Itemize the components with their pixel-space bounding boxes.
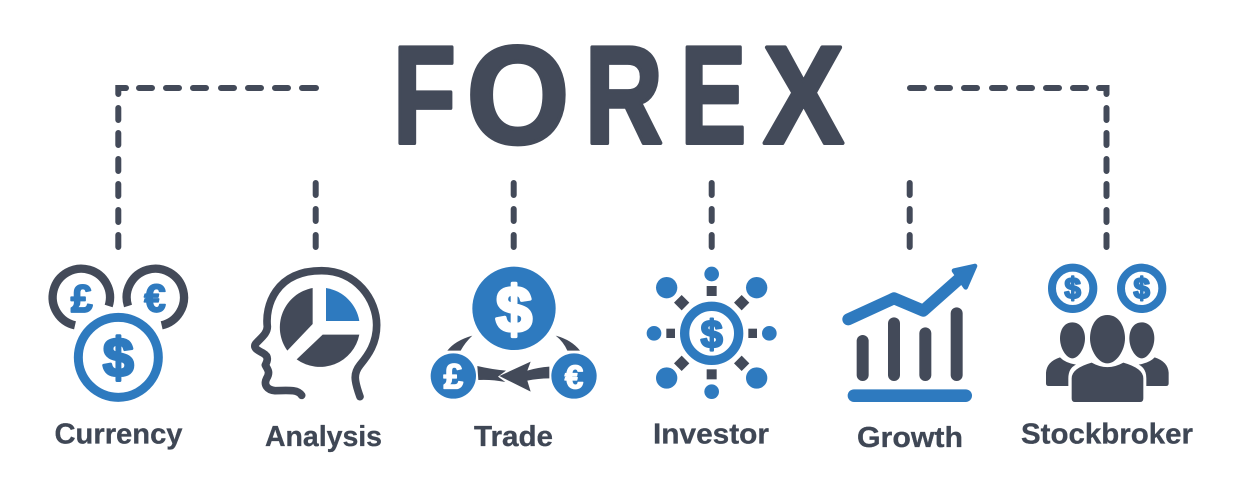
icon: head with pie chart bbox=[255, 271, 377, 397]
icon: currency trade exchange bbox=[431, 267, 597, 399]
label: Growth: Growth bbox=[857, 422, 963, 454]
label: Investor: Investor bbox=[653, 418, 769, 450]
icon: currency coins: € bbox=[144, 278, 166, 321]
icon: stockbroker group: $ bbox=[1134, 273, 1150, 306]
dashed connector: title to Stockbroker bbox=[910, 88, 1106, 247]
icon: currency trade exchange: $ bbox=[496, 272, 532, 345]
icon: currency trade exchange: £ bbox=[444, 358, 464, 397]
label: Trade: Trade bbox=[474, 421, 553, 453]
label: Analysis: Analysis bbox=[265, 421, 382, 453]
dashed connector: Trade bbox=[511, 183, 517, 247]
label: Stockbroker: Stockbroker bbox=[1021, 418, 1193, 450]
icon: currency coins: £ bbox=[71, 277, 93, 321]
icon: growth bar chart bbox=[848, 266, 975, 402]
title: FOREX: X bbox=[763, 17, 844, 173]
title: FOREX: R bbox=[585, 18, 663, 173]
icon: stockbroker group: $ bbox=[1065, 273, 1081, 306]
icon: currency coins bbox=[53, 269, 184, 397]
dashed connector: Analysis bbox=[313, 183, 319, 247]
title: FOREX: E bbox=[680, 17, 746, 173]
dashed connector: Growth bbox=[907, 183, 913, 247]
icon: investor network bbox=[647, 267, 777, 399]
label: Currency: Currency bbox=[54, 418, 182, 450]
icon: stockbroker group bbox=[1046, 268, 1169, 402]
dashed connector: Investor bbox=[709, 183, 715, 247]
title: FOREX: O bbox=[467, 17, 569, 173]
title: FOREX bbox=[393, 17, 844, 173]
dashed connector: title to Currency bbox=[118, 88, 316, 247]
title: FOREX: F bbox=[393, 17, 456, 173]
icon: investor network: $ bbox=[701, 312, 723, 356]
icon: currency coins: $ bbox=[103, 327, 134, 389]
icon: currency trade exchange: € bbox=[565, 359, 583, 396]
